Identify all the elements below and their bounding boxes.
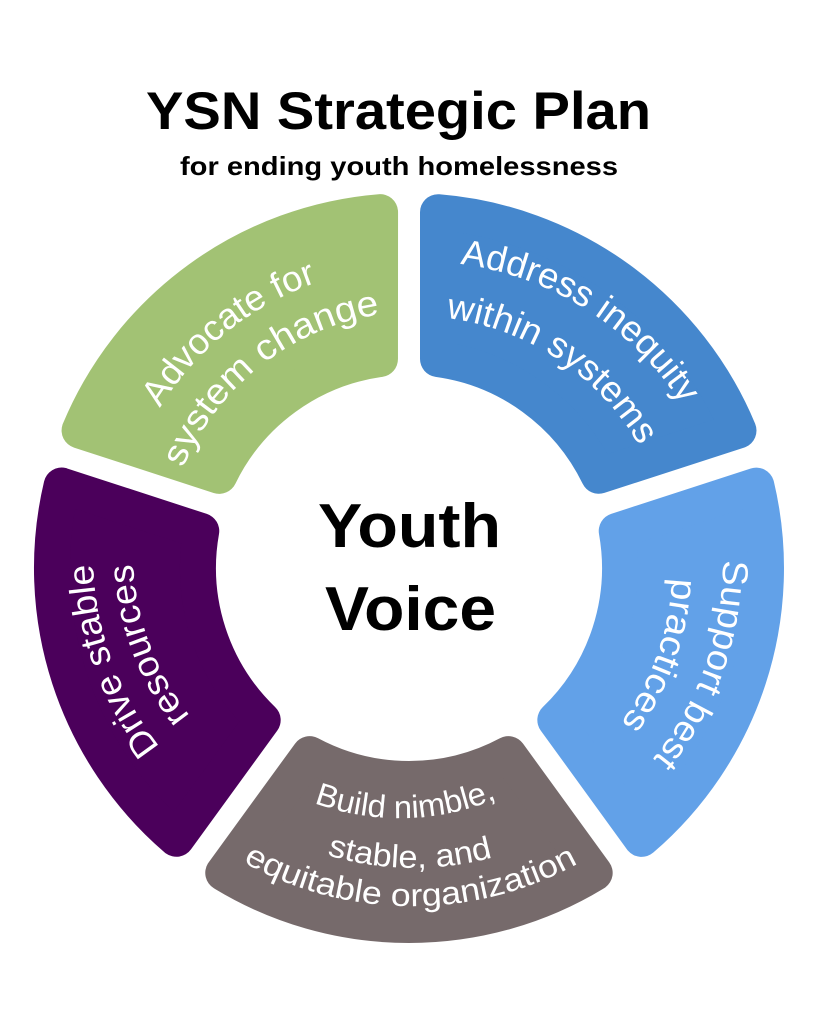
panel: address inequity within systems: within systems bbox=[449, 298, 653, 443]
panel: build nimble, stable, and equitable organization: equitable organization bbox=[246, 850, 576, 912]
subtitle: for ending youth homelessness bbox=[180, 151, 618, 181]
panel: support best practices: practices bbox=[624, 580, 691, 730]
center label: youth voice bbox=[318, 492, 501, 644]
panel: address inequity within systems: Address inequity bbox=[460, 241, 698, 399]
panel: build nimble, stable, and equitable organization: Build nimble, bbox=[316, 783, 494, 818]
panel: build nimble, stable, and equitable organization: stable, and bbox=[328, 835, 491, 872]
panel: support best practices bbox=[537, 468, 784, 857]
panel: support best practices: Support best bbox=[653, 562, 748, 770]
panel: drive stable resources: Drive stable bbox=[68, 566, 158, 760]
panel: build nimble, stable, and equitable organization bbox=[205, 736, 613, 943]
panel: advocate for system change bbox=[62, 194, 398, 494]
title: YSN Strategic Plan bbox=[146, 82, 651, 141]
panel: advocate for system change: system change bbox=[168, 296, 377, 466]
center label: youth voice: Youth bbox=[318, 492, 501, 561]
panel: drive stable resources bbox=[34, 468, 281, 857]
panel: address inequity within systems bbox=[420, 194, 756, 494]
panel: advocate for system change: Advocate for bbox=[145, 264, 311, 408]
center label: youth voice: Voice bbox=[325, 575, 496, 644]
panel: drive stable resources: resources bbox=[114, 566, 188, 726]
